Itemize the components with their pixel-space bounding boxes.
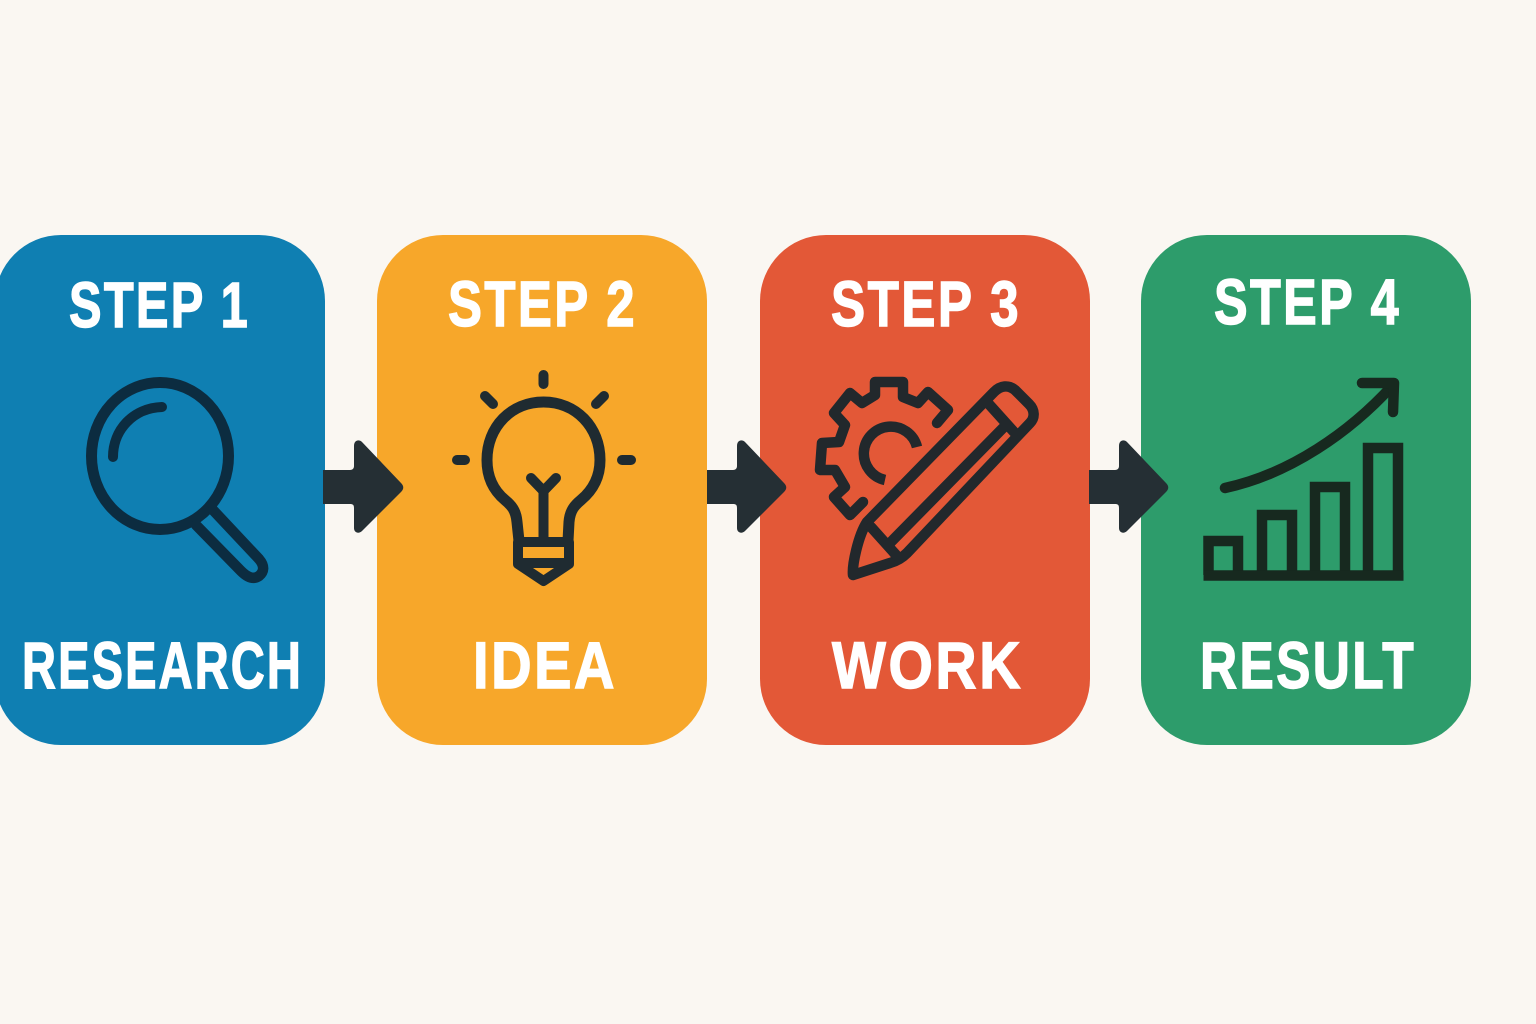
card background orange bbox=[377, 235, 707, 745]
label: research: RESEARCH bbox=[22, 628, 303, 702]
label: idea: IDEA bbox=[473, 628, 617, 702]
panel: step 1 research bbox=[0, 235, 325, 745]
icon: rising bar chart bbox=[1204, 383, 1404, 576]
heading: step 2: STEP 2 bbox=[448, 268, 637, 340]
icon: gear and pencil bbox=[820, 382, 1034, 575]
card background red bbox=[760, 235, 1090, 745]
label: work: WORK bbox=[832, 628, 1023, 702]
card background green bbox=[1141, 235, 1471, 745]
panel: step 2 idea bbox=[377, 235, 707, 745]
arrow: step 1 to step 2 bbox=[323, 440, 403, 533]
card background blue bbox=[0, 235, 325, 745]
arrow: step 2 to step 3 bbox=[707, 440, 786, 533]
icon: magnifying glass bbox=[92, 382, 263, 578]
heading: step 3: STEP 3 bbox=[831, 268, 1021, 340]
panel: step 4 result bbox=[1141, 235, 1471, 745]
heading: step 1: STEP 1 bbox=[69, 269, 250, 341]
panel: step 3 work bbox=[760, 235, 1090, 745]
heading: step 4: STEP 4 bbox=[1214, 266, 1401, 338]
icon: light bulb bbox=[457, 375, 631, 581]
label: result: RESULT bbox=[1200, 628, 1416, 702]
arrow: step 3 to step 4 bbox=[1089, 440, 1168, 533]
